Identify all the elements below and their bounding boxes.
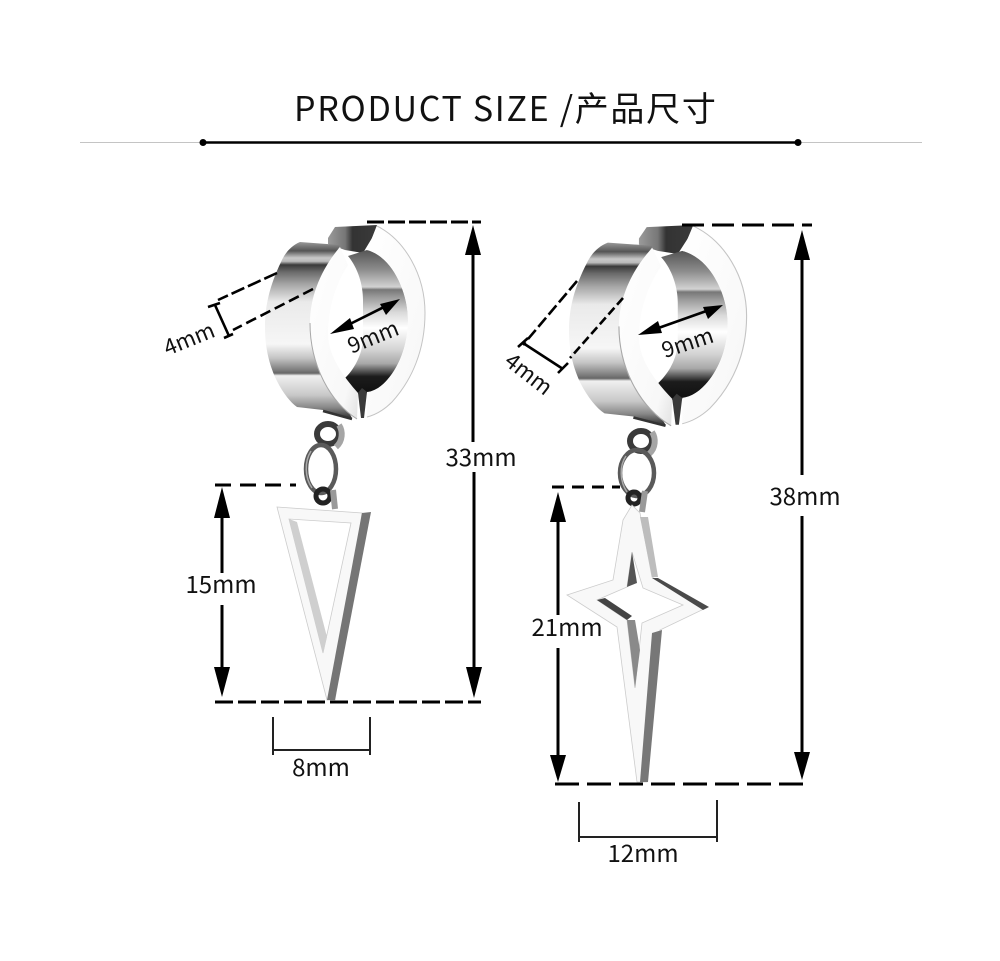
dimension: 8mm width xyxy=(273,717,370,783)
triangle pendant xyxy=(277,507,371,700)
dimension: 4mm band width, left: 4mm xyxy=(158,313,219,362)
dimension: 9mm inner diameter, left: 9mm xyxy=(342,311,403,360)
dimension: 33mm height: 33mm xyxy=(445,438,517,473)
title: PRODUCT SIZE /产品尺寸 xyxy=(294,82,718,131)
earring: star drop xyxy=(567,225,747,782)
dimension: 9mm inner diameter, right xyxy=(638,305,723,365)
dimension: 8mm width: 8mm xyxy=(292,748,350,783)
star pendant xyxy=(567,505,709,782)
dimension: 12mm width: 12mm xyxy=(607,834,679,869)
chain links, left earring xyxy=(306,424,342,509)
ring hoop, right earring xyxy=(569,225,747,426)
dimension: 9mm inner diameter, left xyxy=(330,299,403,360)
dimension: 21mm pendant height: 21mm xyxy=(531,608,603,643)
dimension: 12mm width xyxy=(579,800,717,869)
title divider xyxy=(80,139,922,146)
dimension: 38mm height: 38mm xyxy=(769,477,841,512)
ring hoop, left earring xyxy=(265,225,425,419)
chain links, right earring xyxy=(620,431,655,512)
dimension: 4mm band width, left xyxy=(158,273,313,362)
dimension: 38mm height xyxy=(682,225,841,780)
dimension: 21mm pendant height xyxy=(531,487,810,784)
dimension: 15mm pendant height: 15mm xyxy=(185,565,257,600)
dimension: 4mm band width, right: 4mm xyxy=(499,344,560,402)
dimension: 9mm inner diameter, right: 9mm xyxy=(657,318,717,365)
dimension: 4mm band width, right xyxy=(499,281,623,402)
dimension: 33mm height xyxy=(367,222,517,698)
dimension: 15mm pendant height xyxy=(185,485,481,702)
earring: triangle drop xyxy=(265,225,425,700)
